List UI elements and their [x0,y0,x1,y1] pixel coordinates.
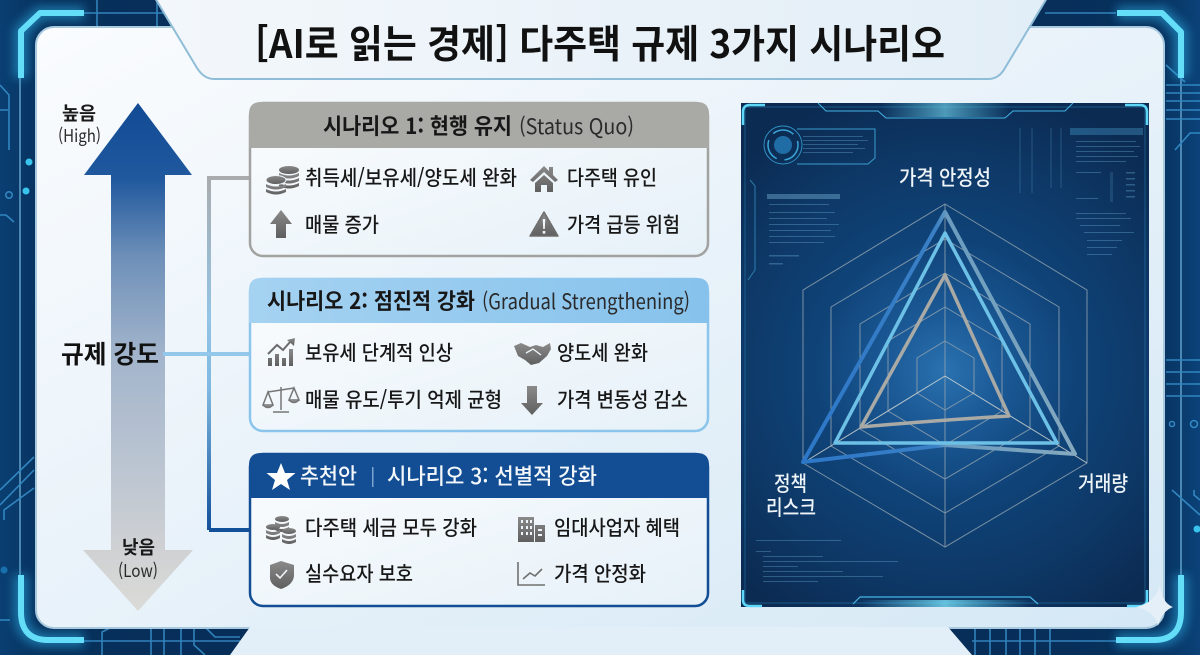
item: 취득세/보유세/양도세 완화 [305,161,517,191]
icon: down arrow [521,386,543,415]
icon: line chart [518,562,545,585]
icon: star [266,463,296,490]
item: 다주택 세금 모두 강화 [305,511,477,541]
title: [AI로 읽는 경제] 다주택 규제 3가지 시나리오 [255,14,945,70]
panel: radar chart image [741,103,1149,607]
intensity arrow [83,103,193,611]
icon: house [530,166,558,192]
axis label: policy risk: 리스크 [766,492,816,522]
HUD text blocks [756,128,1143,582]
scenario 1 header [249,102,709,148]
radar grid [803,204,1087,547]
scenario 2 header: (Gradual Strengthening) [482,286,690,316]
scenario 3 header [249,453,709,498]
scenario 3 header: 시나리오 3: 선별적 강화 [387,459,597,491]
axis label: policy risk: 정책 [774,468,807,498]
icon: sparkle [1136,585,1173,626]
bottom tab [230,627,972,655]
scenario 1 header: (Status Quo) [519,111,634,141]
icon: rising chart [268,338,295,366]
item: 보유세 단계적 인상 [305,336,453,366]
item: 실수요자 보호 [305,557,413,587]
icon: scales [263,387,299,412]
scenario 1 header: 시나리오 1: 현행 유지 [323,109,512,141]
panel: scenario 2 [249,278,709,431]
icon: coins [266,166,299,194]
panel: scenario 3 recommended [249,453,709,606]
item: 임대사업자 혜택 [554,511,680,541]
axis label: volume: 거래량 [1078,468,1128,498]
icon: shield [270,561,294,589]
scenario 3 header: 추천안 [300,459,357,491]
icon: buildings [518,517,545,542]
radar series: light blue [835,233,1057,443]
item: 양도세 완화 [557,336,648,366]
scenario 2 header [249,278,709,323]
axis label: policy risk [766,468,816,522]
radar series: grey [861,275,1009,427]
label: high [58,100,101,148]
label: high: (High) [58,123,101,148]
label: low: 낮음 [122,534,155,560]
label: low: (Low) [118,558,158,583]
scenario 2 header: 시나리오 2: 점진적 강화 [267,284,475,316]
item: 가격 안정화 [554,557,646,587]
icon: up arrow [270,210,292,238]
title tab [155,0,1047,79]
HUD frame [743,103,1147,607]
label: low [118,534,158,583]
axis label: price stability: 가격 안정성 [899,162,991,192]
label: regulation intensity: 규제 강도 [61,335,159,371]
icon: warning [530,212,558,236]
item: 다주택 유인 [567,161,657,191]
item: 매물 증가 [305,208,379,238]
item: 매물 유도/투기 억제 균형 [305,383,502,413]
panel: scenario 1 [249,102,709,256]
icon: handshake [514,343,551,365]
icon: coin stacks [266,516,296,544]
connector lines [163,178,249,530]
item: 가격 급등 위험 [567,208,680,238]
item: 가격 변동성 감소 [557,383,688,413]
label: high: 높음 [62,100,96,126]
radar series: outer blue [803,212,1075,462]
